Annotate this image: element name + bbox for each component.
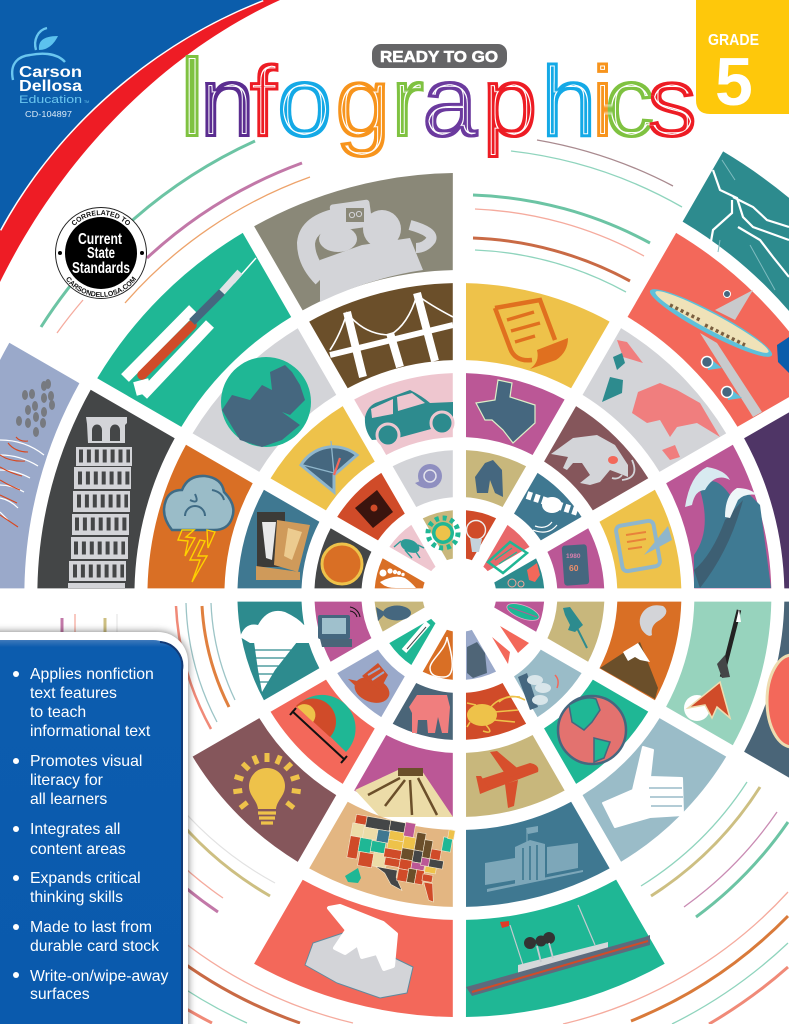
publisher logo: Dellosa [19,78,82,95]
wedge: bicycle courier [493,558,551,609]
title: i [592,46,614,158]
wedge: spider [446,675,526,754]
series pill: READY TO GO [380,49,498,66]
standards badge: CARSONDELLOSA.COM [66,276,136,298]
wedge: mammoth [535,406,661,526]
wedge: money stack [483,525,534,583]
corner swoosh [0,0,280,282]
feature bullet list: all learners [30,791,107,808]
title: I [176,31,208,161]
wedge: polar bear [254,880,453,1017]
wedge: water drop [423,630,453,680]
feature bullet list: Integrates all [30,821,120,838]
wedge: gauge dial [271,393,391,519]
wedge: airliner cutaway [607,233,789,451]
grade tab [696,0,789,120]
publisher logo [12,28,89,119]
standards badge: State [87,245,115,262]
wedge: step pyramid [354,735,453,817]
wedge: glowing light bulb [173,699,350,862]
title: p [482,46,538,158]
wedge: fish [368,581,426,632]
wedge: leaning tower [37,390,175,588]
wedge: sound waves crowd [0,343,79,588]
wedge: sailing ship [502,645,582,725]
wedge: thumbs up [563,704,726,881]
wedge: coral sails [492,626,529,664]
feature bullet list: to teach [30,704,86,721]
standards badge: CORRELATED TO [72,210,130,226]
wedge: writing document [584,490,704,616]
feature bullet list: Applies nonfiction [30,666,154,683]
feature bullet list: surfaces [30,986,90,1003]
standards badge: Standards [72,260,130,277]
ring 3 wedges [215,350,704,840]
wedge: floppy disk [337,465,417,545]
wedge: globe asia [193,309,355,486]
wedge: orange circle [314,528,371,588]
feature bullet list [13,666,169,1003]
wedge: elephant [393,683,453,740]
wedge: world map [568,328,745,491]
standards badge [55,207,147,299]
wedge: ocean wave [642,445,789,622]
wedge: selfie friends [254,127,495,345]
wedge: storm cloud [148,445,253,588]
ring 1: inner wedges [368,503,551,687]
title: h [541,46,597,158]
wedge: oil barrel [539,528,618,609]
wedge: stone head [445,628,496,687]
wedge: earth [528,671,648,797]
ring 2 wedges [301,436,618,754]
wedge: paper scroll [466,283,610,388]
wedge: sun [423,503,474,562]
series pill [372,44,507,68]
wedge: balloon capsule [744,602,789,800]
title: a [422,46,478,158]
wedge: volcano [599,602,681,700]
wedge: laptop [301,581,380,662]
wedge: satellite [509,473,590,552]
publisher logo: Education [19,94,82,106]
wedge: oil barrel: 1980 [566,553,581,560]
wedge: green leaf [494,600,544,632]
title: n [200,46,255,158]
wedge: oil barrel: 60 [569,563,579,573]
title: s [647,46,697,158]
feature bullet list: Expands critical [30,870,141,887]
publisher logo: Carson [19,64,82,81]
feature bullet list: Promotes visual [30,753,142,770]
wedge: lightning storm [655,151,789,392]
features panel [0,632,188,1024]
wedge: light bulb sketch [466,510,496,560]
publisher logo: TM [84,100,89,104]
ring 6 wedges [0,151,789,588]
ring 4 wedges [148,250,789,940]
title: g [335,46,391,158]
wedge: teapot [329,638,410,717]
wedge: airplane [438,720,565,840]
title: o [277,46,332,158]
wedge: space rocket [97,206,315,447]
wedge: mummy and sarcophagus [238,490,319,588]
wedge: spiral shell [393,436,473,515]
feature bullet list: text features [30,685,117,702]
wedge: Texas map [466,373,565,455]
standards badge: Current [78,231,122,248]
wedge: tornado [215,574,335,700]
wedge: USA state map [309,802,455,907]
feature bullet list: Made to last from [30,919,152,936]
title: f [250,46,278,158]
wedge: bird [547,602,604,662]
wedge: deep purple [709,390,789,630]
grade tab: 5 [715,44,753,120]
feature bullet list: Write-on/wipe-away [30,968,169,985]
wedge: gorilla [466,450,526,507]
wedge: steam ship [424,845,665,1024]
grade tab: GRADE [708,32,759,49]
title: r [391,46,424,158]
feature bullet list: thinking skills [30,889,123,906]
wedge: footprint [375,558,425,588]
feature bullet list: literacy for [30,772,103,789]
wedge: government building [433,777,610,940]
feature bullet list: informational text [30,723,151,740]
wedge: suspension bridge [309,250,486,413]
wedge: toy rocket launch [666,602,771,745]
publisher logo: CD-104897 [25,110,73,119]
feature bullet list: content areas [30,841,126,858]
wedge: obelisk [385,607,436,665]
feature bullet list: durable card stock [30,938,159,955]
title: c [604,46,654,158]
wedge: cricket [389,521,448,572]
wedge: rainbow arc diagram [257,664,384,784]
wedge: car [354,350,481,470]
